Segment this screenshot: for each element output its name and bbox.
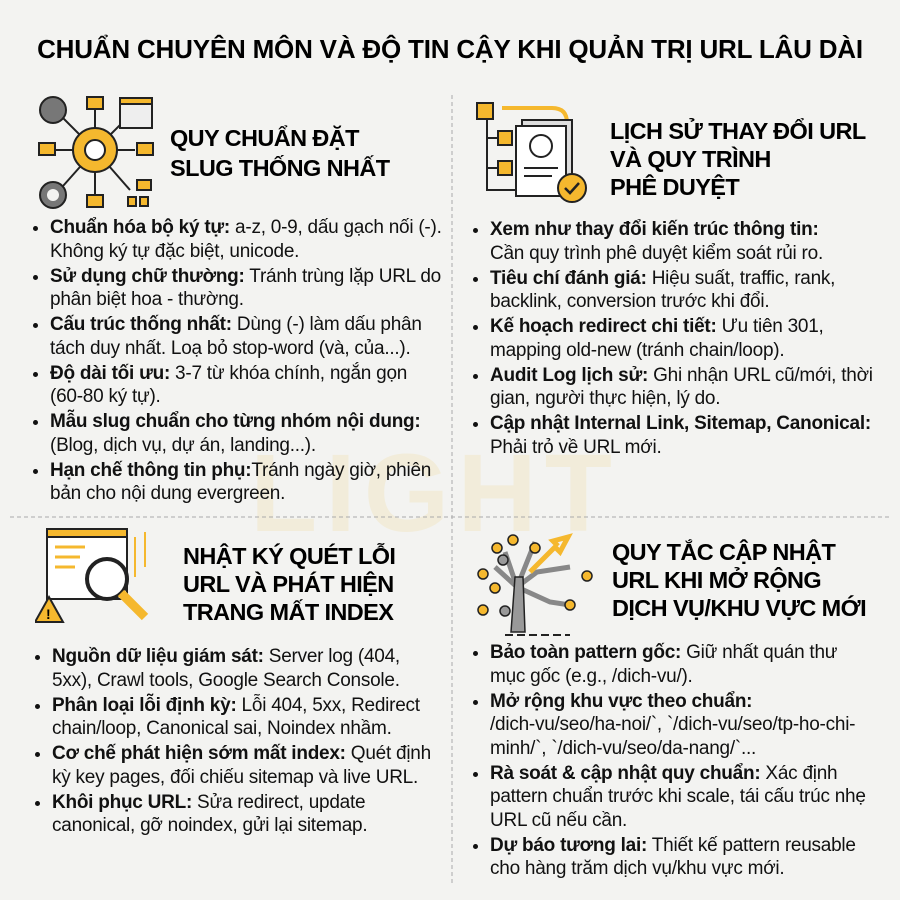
icon: log scan magnifier [35,528,148,623]
text: expansion bullets: Rà soát & cập nhật quy chuẩn: Xác định pattern chuẩn trước khi scale, tái cấu trúc nhẹ URL cũ nếu cần. [490,762,866,830]
text: slug bullets: Chuẩn hóa bộ ký tự: a-z, 0-9, dấu gạch nối (-). Không ký tự đặc biệt, unicode. [50,217,442,262]
heading: scan log: URL VÀ PHÁT HIỆN [183,571,394,597]
heading: scan log [183,543,395,625]
heading: scan log: NHẬT KÝ QUÉT LỖI [183,543,395,569]
text: scan log bullets: Nguồn dữ liệu giám sát: Server log (404, 5xx), Crawl tools, Google Search Console. [52,646,400,690]
icon: log scan magnifier: ! [46,606,51,622]
icon: tree with arrow [477,533,593,636]
heading: history: LỊCH SỬ THAY ĐỔI URL [610,118,866,144]
text: expansion bullets: /dich-vu/seo/ha-noi/`, `/dich-vu/seo/tp-ho-chi-minh/`, `/dich-vu/seo/da-nang/`... [490,714,855,758]
text: scan log bullets: Khôi phục URL: Sửa redirect, update canonical, gỡ noindex, gửi lại sitemap. [52,792,367,836]
text: slug bullets [33,217,442,504]
heading: history [610,118,866,200]
text: history bullets: Xem như thay đổi kiến trúc thông tin: [490,219,819,240]
icon: gears network [38,96,154,209]
text: slug bullets: Mẫu slug chuẩn cho từng nhóm nội dung: (Blog, dịch vụ, dự án, landing...). [50,411,420,456]
text: history bullets: Cần quy trình phê duyệt kiểm soát rủi ro. [490,242,823,264]
text: scan log bullets [35,646,431,836]
text: expansion bullets: Dự báo tương lai: Thiết kế pattern reusable cho hàng trăm dịch vụ/khu vực mới. [490,834,856,879]
text: history bullets: Cập nhật Internal Link, Sitemap, Canonical: Phải trỏ về URL mới. [490,413,871,458]
heading: expansion [612,539,866,621]
heading: slug: SLUG THỐNG NHẤT [170,155,389,181]
heading: history: PHÊ DUYỆT [610,174,739,200]
heading: expansion: QUY TẮC CẬP NHẬT [612,539,835,565]
text: slug bullets: Hạn chế thông tin phụ:Tránh ngày giờ, phiên bản cho nội dung evergreen. [50,460,431,504]
text: slug bullets: Cấu trúc thống nhất: Dùng (-) làm dấu phân tách duy nhất. Loạ bỏ stop-word (và, của...). [50,314,422,358]
text: history bullets: Kế hoạch redirect chi tiết: Ưu tiên 301, mapping old-new (tránh chain/loop). [490,316,824,360]
text: slug bullets: Độ dài tối ưu: 3-7 từ khóa chính, ngắn gọn [50,362,407,384]
text: history bullets [473,219,873,458]
heading: expansion: URL KHI MỞ RỘNG [612,567,821,593]
text: expansion bullets [473,642,866,879]
text: history bullets: Tiêu chí đánh giá: Hiệu suất, traffic, rank, backlink, conversion trước khi đổi. [490,268,835,312]
text: scan log bullets: Cơ chế phát hiện sớm mất index: Quét định kỳ key pages, đối chiếu sitemap và live URL. [52,743,431,788]
heading: history: VÀ QUY TRÌNH [610,146,771,172]
heading: slug [170,125,390,181]
heading: scan log: TRANG MẤT INDEX [183,599,393,625]
text: scan log bullets: Phân loại lỗi định kỳ: Lỗi 404, 5xx, Redirect chain/loop, Canonical sai, Noindex nhầm. [52,694,420,739]
text: history bullets: Audit Log lịch sử: Ghi nhận URL cũ/mới, thời gian, người thực hiện, lý do. [490,364,873,409]
watermark: LIGHT [250,432,620,555]
heading: slug: QUY CHUẨN ĐẶT [170,125,359,151]
text: slug bullets: Sử dụng chữ thường: Tránh trùng lặp URL do phân biệt hoa - thường. [50,266,441,310]
text: expansion bullets: Bảo toàn pattern gốc: Giữ nhất quán thư [490,642,837,663]
text: slug bullets: (60-80 ký tự). [50,386,161,407]
icon: document history [476,102,587,203]
title: CHUẨN CHUYÊN MÔN VÀ ĐỘ TIN CẬY KHI QUẢN TRỊ URL LÂU DÀI [37,34,863,64]
heading: expansion: DỊCH VỤ/KHU VỰC MỚI [612,595,866,621]
text: expansion bullets: Mở rộng khu vực theo chuẩn: [490,690,752,712]
text: expansion bullets: mục gốc (e.g., /dich-vu/). [490,666,693,686]
